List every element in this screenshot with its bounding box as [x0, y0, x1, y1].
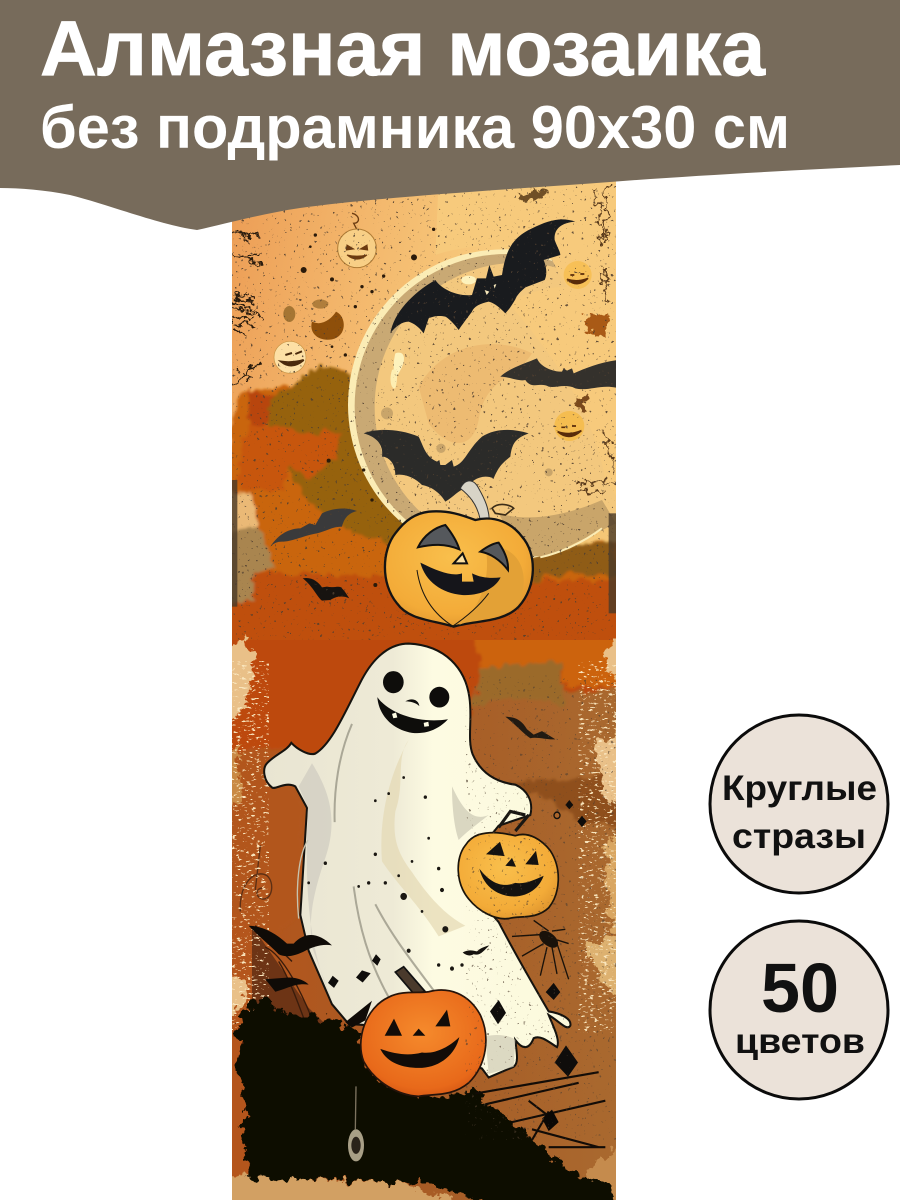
ghost body: [264, 644, 570, 1077]
poster upper half: moon and bats: [232, 182, 616, 640]
small hanging pumpkin top: [338, 213, 376, 268]
mustard and red paint patches: [222, 367, 625, 653]
light speckle along edges: [232, 661, 616, 1033]
dark worn left and right edge: [232, 480, 616, 613]
bats at lower left: [249, 926, 372, 1027]
title: Алмазная мозаика: [40, 4, 766, 92]
ghost: [264, 644, 570, 1077]
bat lower center: [364, 430, 529, 502]
badge: round rhinestones: Круглые: [722, 769, 877, 808]
poster artwork: [232, 182, 616, 1200]
poster lower half: ghost and pumpkins: [232, 634, 616, 1200]
badge: 50 colours: цветов: [735, 1022, 865, 1061]
badge: 50 colours: [710, 921, 888, 1099]
badge: round rhinestones: [710, 715, 888, 893]
background parchment gradient: [232, 194, 616, 559]
paint patches: [232, 640, 616, 828]
bat top right of lower panel: [505, 717, 555, 739]
large jack-o-lantern: [385, 481, 533, 627]
grunge: right edge: [519, 183, 616, 492]
jack-o-lantern in ghost's hand: [458, 811, 558, 919]
black mound: [239, 1000, 619, 1200]
dots scatter: [301, 228, 435, 587]
grunge: top-left branches: [232, 230, 265, 383]
orange jack-o-lantern: [361, 967, 486, 1096]
badge: round rhinestones: стразы: [732, 817, 866, 856]
diamonds on ghost: [328, 954, 506, 1024]
spiral and tree silhouette left: [240, 845, 323, 1024]
tan worn border: [222, 640, 625, 1200]
ghost nose: [405, 699, 419, 706]
small bat left low: [303, 578, 349, 601]
dark blot pumpkin: [283, 299, 344, 340]
header banner: [0, 0, 900, 230]
ghost smile: [377, 697, 448, 733]
moon highlights: [394, 353, 404, 375]
moon rim lower right: [540, 528, 602, 557]
decorative diamonds right: [546, 800, 587, 1077]
dark speckles lower: [465, 676, 616, 1140]
dark speckles top: [232, 180, 616, 640]
sky overlapping the moon's upper right: [436, 194, 616, 300]
small bat left flying: [270, 509, 357, 547]
ghost shading mottled: [381, 740, 465, 936]
lower background: [232, 640, 616, 1200]
small pumpkin right middle: [554, 411, 584, 441]
large bat upper: [390, 219, 575, 333]
ghost eyes: [383, 671, 404, 693]
moon: [348, 194, 616, 558]
ghost speckles: [307, 776, 464, 971]
bat right: [500, 358, 619, 389]
badge: 50 colours: 50: [761, 949, 839, 1027]
small pumpkin face left: [274, 341, 306, 373]
tiny bat on ghost: [463, 945, 489, 955]
small pumpkin right top: [564, 261, 592, 289]
subtitle: без подрамника 90х30 см: [40, 94, 790, 161]
spider: [512, 920, 569, 979]
